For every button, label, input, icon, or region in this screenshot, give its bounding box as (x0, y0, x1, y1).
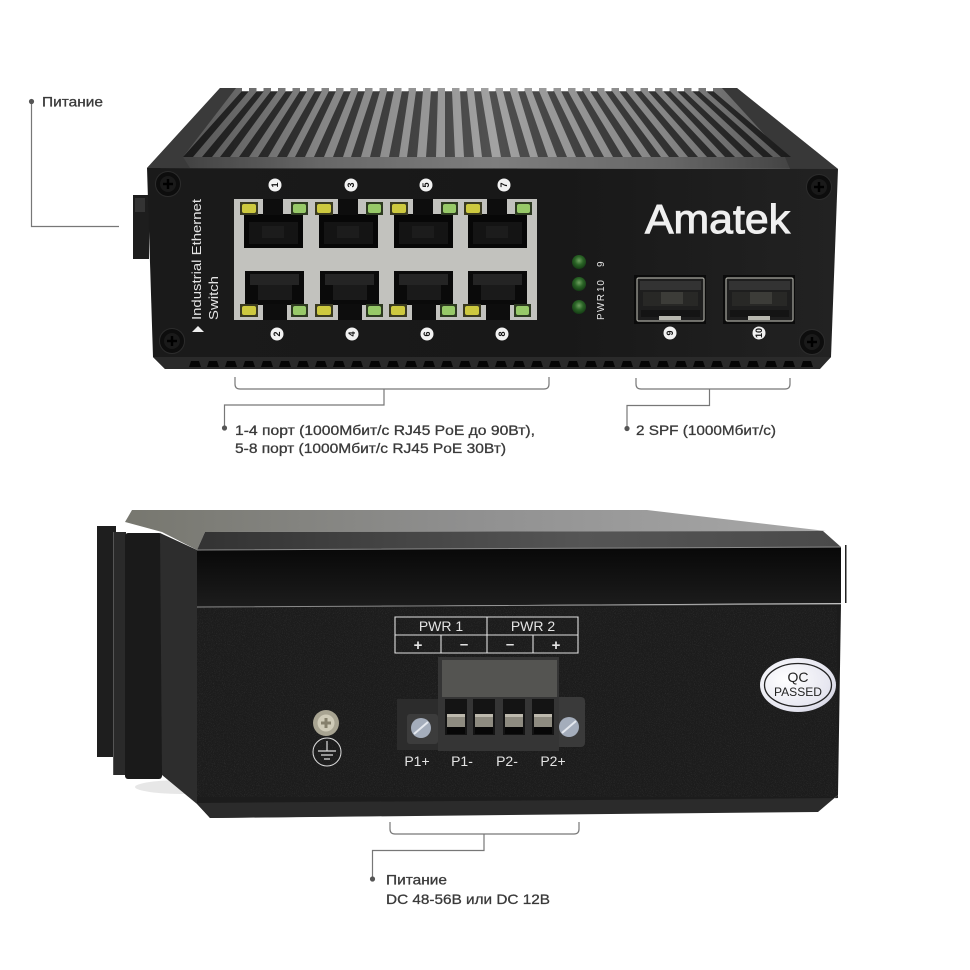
panel speckle (197, 607, 837, 797)
terminal labels: P2+ (540, 753, 566, 769)
vertical label: Industrial Ethernet Switch (189, 199, 221, 332)
QC PASSED sticker (760, 658, 836, 712)
rear panel (197, 604, 841, 818)
floor shadow (135, 780, 235, 794)
side power connector (133, 195, 149, 259)
vertical label: Industrial Ethernet Switch: Industrial Ethernet (189, 199, 204, 320)
label: power (top device) (29, 94, 119, 226)
QC PASSED sticker: PASSED (774, 685, 822, 699)
terminal block connector (397, 657, 585, 751)
PWR label table: PWR 1 (419, 618, 463, 634)
right edge strip (845, 545, 846, 603)
heatsink top with fins (147, 88, 838, 169)
port numbers: 2 (272, 331, 282, 337)
port numbers: 6 (422, 331, 432, 337)
ports 1, 3, 5, 7 (240, 199, 532, 248)
port numbers: 10 (754, 328, 764, 338)
QC PASSED sticker: QC (788, 669, 808, 685)
port numbers: 1 (270, 182, 280, 188)
bullet (29, 99, 34, 104)
bullet (222, 425, 227, 431)
DIN rail clip (97, 526, 162, 779)
PWR label table: – (460, 636, 468, 653)
port numbers: 5 (421, 182, 431, 188)
corner screws (156, 172, 832, 354)
PWR label table: + (552, 637, 561, 654)
bracket and label: power input (370, 822, 579, 907)
top device: switch front view (133, 88, 838, 369)
RJ45 port block (234, 199, 537, 320)
text line 1: 1-4 порт (1000Мбит/с RJ45 PoE до 90Вт), (235, 422, 535, 438)
LED labels: 10 (596, 280, 607, 292)
chamfer strip (197, 531, 841, 550)
terminal labels: P1+ (404, 753, 430, 769)
vertical label: Industrial Ethernet Switch: Switch (206, 276, 221, 320)
bracket with leader (627, 378, 790, 428)
bottom vent slots (189, 361, 813, 367)
bracket with leader (224, 377, 549, 428)
terminal labels: P2- (496, 753, 518, 769)
ground screw and symbol (313, 710, 341, 766)
Amatek logo: Amatek (645, 196, 791, 242)
text line 1: Питание (386, 872, 447, 888)
text line 2: DC 48-56В или DC 12В (386, 891, 550, 907)
port numbers: 7 (499, 182, 509, 188)
LED labels: PWR (596, 294, 607, 320)
terminal labels (404, 753, 566, 769)
label text: Питание (42, 94, 103, 110)
PWR label table: – (506, 636, 514, 653)
leader line to power connector (32, 101, 119, 226)
lower chamfer (197, 795, 838, 818)
SFP cages (634, 275, 795, 324)
bullet (370, 876, 375, 882)
bracket and label: RJ45 ports (222, 377, 549, 456)
front face (147, 168, 838, 369)
bracket and label: SFP ports (624, 378, 790, 438)
text: 2 SPF (1000Мбит/с) (636, 422, 776, 438)
ports 2, 4, 6, 8 (240, 271, 531, 320)
bracket with leader (372, 822, 579, 878)
port numbers: 8 (497, 331, 507, 337)
bottom device: switch rear view (97, 510, 846, 818)
port numbers (268, 178, 766, 340)
PWR label table: + (414, 637, 423, 654)
LED labels (596, 261, 607, 320)
PWR label table: PWR 2 (511, 618, 555, 634)
port numbers: 4 (347, 331, 357, 337)
port numbers: 9 (665, 330, 675, 336)
text line 2: 5-8 порт (1000Мбит/с RJ45 PoE 30Вт) (235, 440, 506, 456)
port numbers: 3 (346, 182, 356, 188)
top surface (125, 510, 826, 550)
terminal labels: P1- (451, 753, 473, 769)
LED labels: 9 (596, 261, 607, 267)
status LEDs (572, 255, 586, 314)
bullet (624, 426, 630, 431)
PWR label table (395, 617, 578, 654)
side face (160, 533, 197, 804)
bottom strip (153, 357, 831, 369)
dark band (197, 547, 841, 607)
highlight edges (197, 547, 841, 607)
